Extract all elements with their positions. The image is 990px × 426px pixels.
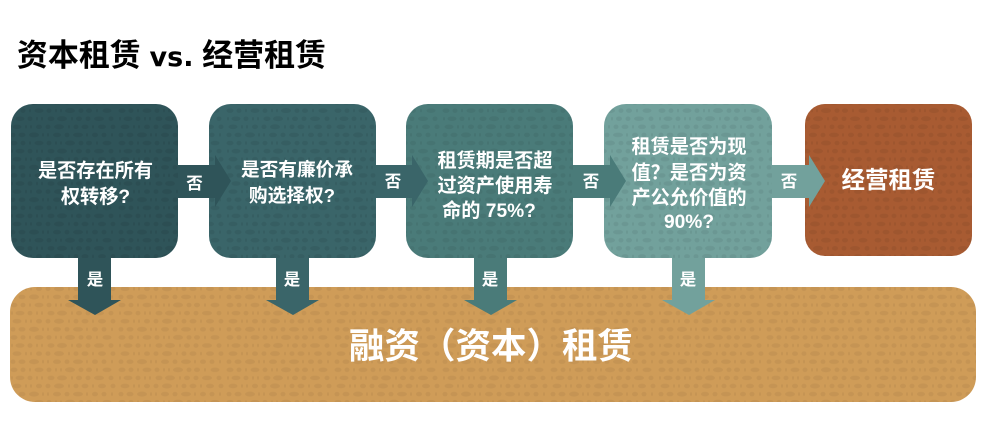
panel: question 2: 购选择权?: [249, 185, 335, 206]
arrow: yes 4: 是: [680, 270, 697, 289]
arrow: yes 3: 是: [482, 270, 499, 289]
arrow: no 1: [178, 155, 231, 207]
title: 资本租赁 vs. 经营租赁: [17, 38, 326, 73]
panel: question 2: [209, 104, 376, 258]
panel: operating lease result: [805, 104, 972, 256]
arrow: yes 2: [266, 258, 319, 315]
panel: question 1: 是否存在所有: [38, 160, 153, 182]
panel: question 4: [604, 104, 772, 258]
panel: question 4: 90%?: [664, 212, 714, 233]
panel: question 4: 产公允价值的: [631, 186, 747, 209]
arrow: no 2: [376, 155, 428, 207]
arrow: yes 1: [68, 258, 121, 315]
arrow: no 4: [772, 155, 825, 207]
panel: capital lease result: [10, 287, 976, 402]
panel: question 4: 租赁是否为现: [631, 136, 747, 158]
panel: capital lease result: 融资（资本）租赁: [349, 326, 633, 366]
panel: question 3: 命的 75%?: [442, 199, 536, 222]
arrow: yes 1: 是: [87, 270, 104, 289]
arrow: no 1: 否: [186, 175, 203, 193]
panel: question 4: 值？是否为资: [631, 162, 747, 184]
panel: question 3: 租赁期是否超: [437, 150, 553, 172]
arrow: yes 2: 是: [284, 270, 301, 289]
arrow: yes 3: [464, 258, 517, 315]
arrow: yes 4: [662, 258, 715, 315]
arrow: no 4: 否: [781, 173, 798, 191]
panel: operating lease result: 经营租赁: [842, 167, 936, 193]
panel: question 3: 过资产使用寿: [437, 175, 553, 197]
panel: question 2: 是否有廉价承: [241, 159, 353, 180]
arrow: no 2: 否: [385, 173, 402, 191]
panel: question 1: [11, 104, 178, 258]
arrow: no 3: 否: [583, 173, 600, 191]
panel: question 1: 权转移?: [61, 186, 130, 208]
panel: question 3: [406, 104, 573, 258]
arrow: no 3: [573, 155, 626, 207]
